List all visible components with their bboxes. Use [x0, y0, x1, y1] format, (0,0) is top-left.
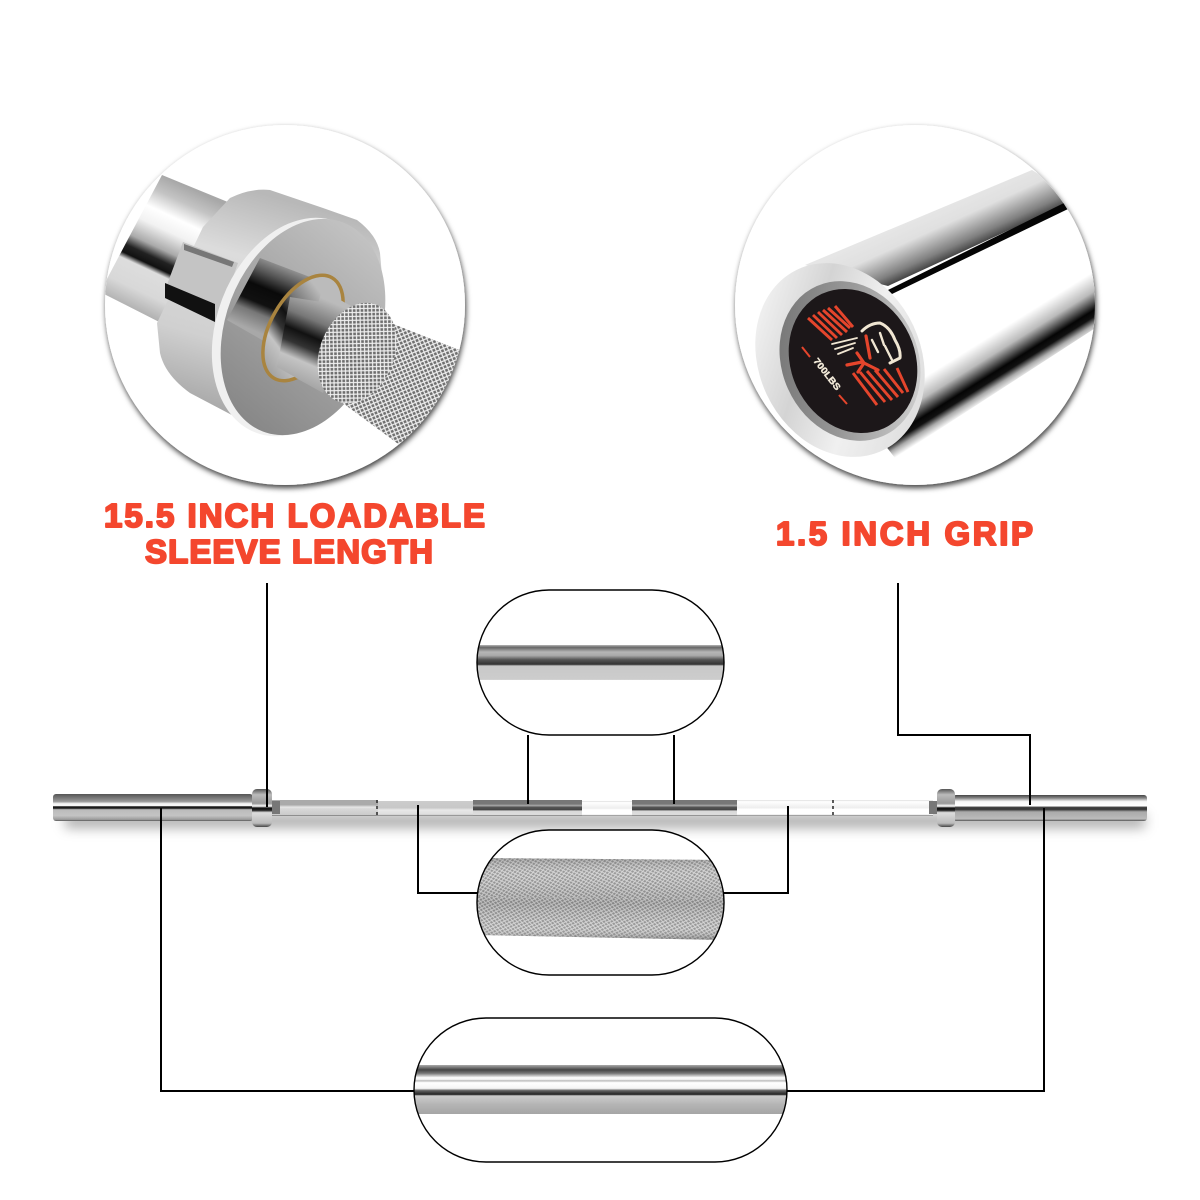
panel: sleeve surface detail pill — [414, 1018, 787, 1162]
red dashes — [802, 347, 847, 404]
neck highlight — [184, 244, 234, 267]
collar face — [220, 218, 386, 436]
upper red stripes — [808, 306, 853, 340]
capacity label: 700LBS — [811, 356, 843, 392]
collar body — [157, 190, 383, 430]
shaft stub — [296, 300, 352, 392]
tube upper shading — [805, 170, 1068, 286]
tube lower shading — [885, 268, 1100, 458]
barbell floor shadow — [65, 814, 1145, 828]
barbell — [53, 789, 1147, 827]
centre shaft — [270, 800, 937, 816]
heading: grip: 1.5 INCH GRIP — [776, 515, 1033, 552]
panel: smooth centre detail pill — [477, 590, 724, 735]
lower red stripes — [853, 368, 908, 405]
heading: sleeve length: 15.5 INCH LOADABLE — [104, 497, 485, 534]
bronze ring — [261, 274, 345, 382]
left sleeve — [53, 794, 253, 821]
knurled sleeve end — [318, 302, 460, 444]
panel: knurling detail pill — [477, 830, 724, 975]
inner shaft — [280, 297, 316, 378]
black badge — [788, 289, 918, 433]
neck dark band — [165, 283, 215, 322]
tube thin black line — [888, 203, 1068, 294]
fist emblem — [832, 323, 900, 372]
dark chrome tube — [227, 258, 310, 345]
connector lines — [161, 583, 1044, 1091]
heading: sleeve length: SLEEVE LENGTH — [145, 533, 433, 570]
right sleeve — [953, 795, 1147, 821]
panel: sleeve close-up circle — [100, 125, 490, 485]
panel: grip end close-up circle — [724, 125, 1100, 485]
heading: sleeve length — [104, 497, 485, 570]
collar neck — [165, 242, 238, 322]
inner rim — [780, 281, 920, 441]
right collar — [937, 789, 955, 827]
left collar — [252, 789, 272, 827]
sleeve shaft — [105, 175, 227, 322]
collar chamfer — [212, 218, 330, 436]
end cap ring — [756, 263, 925, 457]
